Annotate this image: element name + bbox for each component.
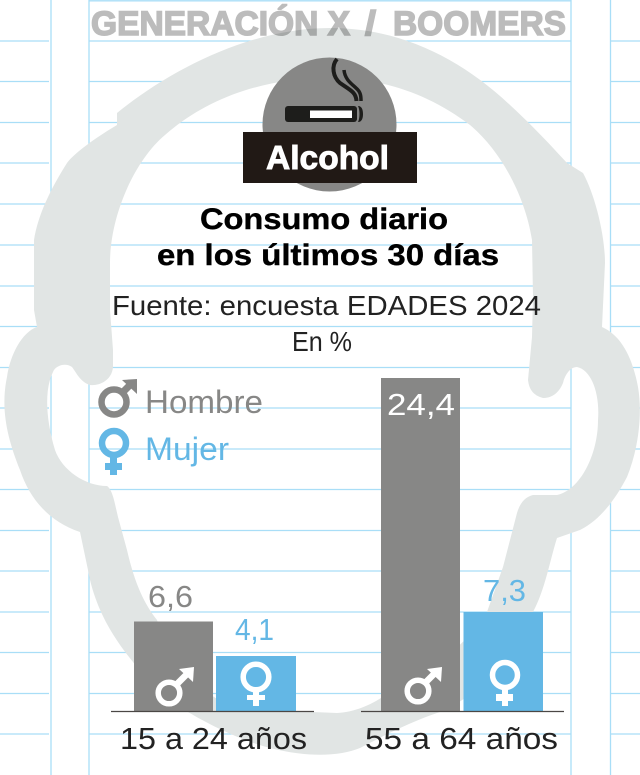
legend: female [102, 431, 229, 475]
axis [361, 710, 564, 712]
heading: generation: GENERACIÓN X [91, 5, 350, 43]
title [157, 203, 499, 272]
bar: mujer 4,1 [216, 612, 296, 712]
label: 15 a 24 años: 15 a 24 años [120, 721, 307, 756]
bar: hombre 6,6 [134, 579, 213, 712]
bar chart [111, 378, 564, 756]
title: en los últimos 30 días [157, 239, 499, 272]
legend: female: Mujer [145, 431, 229, 467]
title: Consumo diario [200, 203, 448, 236]
axis [111, 710, 314, 712]
bar: hombre 24,4 [381, 378, 460, 712]
legend [102, 379, 263, 475]
heading: generation [91, 5, 566, 43]
group: 55 a 64 años [361, 378, 564, 756]
legend: male [102, 379, 263, 420]
bar: mujer 4,1: 4,1 [235, 612, 274, 647]
group: 15 a 24 años [111, 579, 314, 756]
bar: hombre 6,6: 6,6 [148, 579, 193, 614]
label: 55 a 64 años: 55 a 64 años [365, 721, 558, 756]
heading: generation: / [365, 5, 377, 43]
icon: smoke [333, 59, 361, 101]
label: Alcohol: Alcohol [266, 139, 389, 176]
bar: mujer 7,3: 7,3 [483, 573, 526, 608]
label: Alcohol [243, 132, 417, 183]
heading: generation: BOOMERS [393, 5, 566, 43]
source text: Fuente: encuesta EDADES 2024 [112, 290, 541, 321]
icon: cigarette [285, 106, 363, 122]
icon: smoking badge [262, 58, 396, 192]
bar: hombre 24,4: 24,4 [387, 387, 455, 422]
bar: mujer 7,3 [464, 573, 543, 712]
source text: En % [292, 326, 352, 357]
source text [112, 290, 541, 357]
legend: male: Hombre [145, 384, 263, 420]
